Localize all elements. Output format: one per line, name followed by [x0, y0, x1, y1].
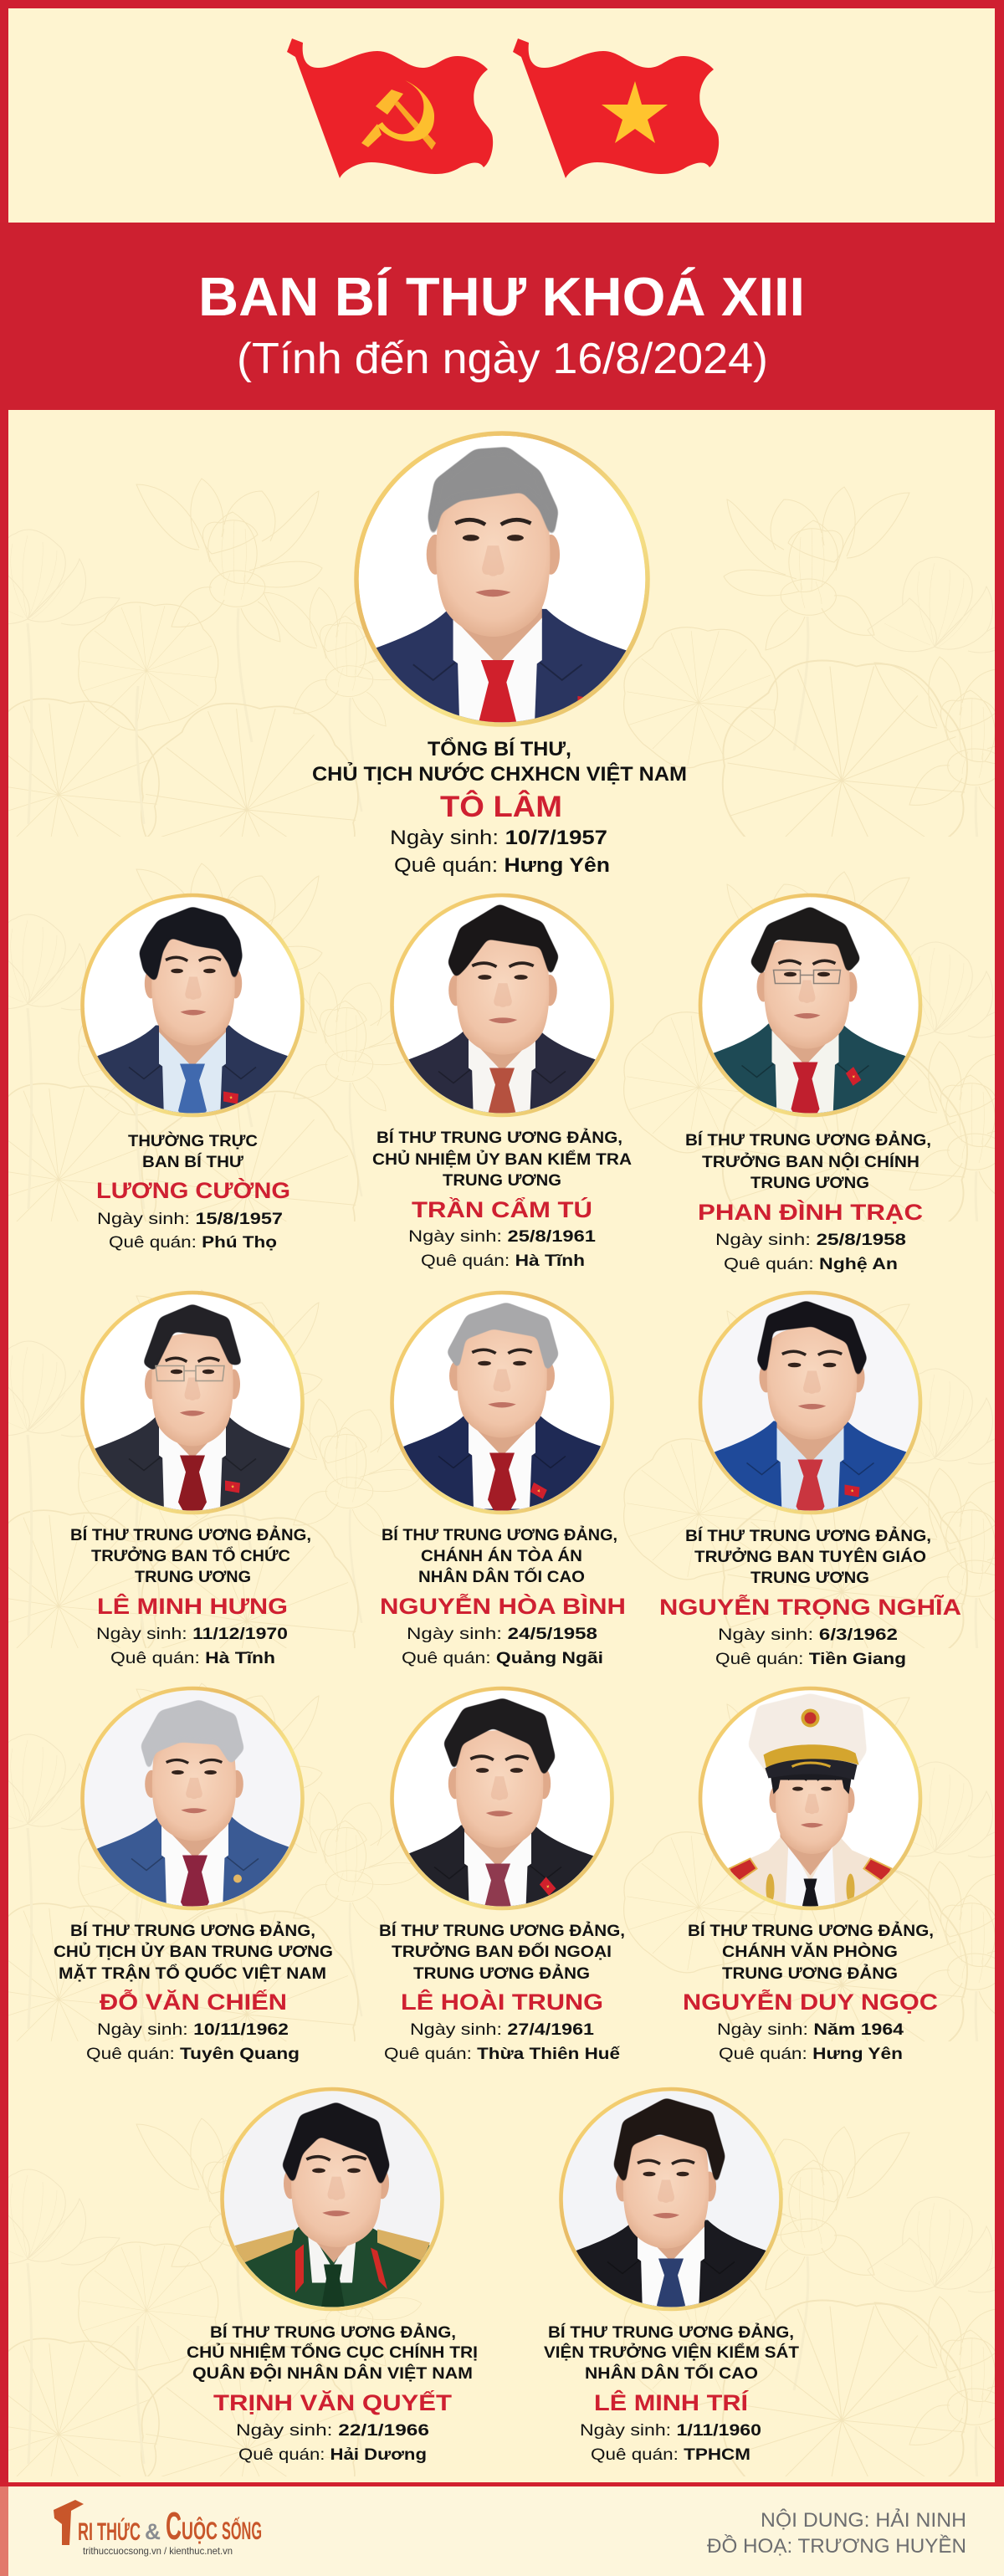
portrait — [389, 1293, 615, 1513]
member: Trần Cẩm Tú — [372, 895, 632, 1270]
role: TRUNG ƯƠNG — [750, 1174, 869, 1192]
role: TRUNG ƯƠNG ĐẢNG — [413, 1964, 590, 1983]
role: BÍ THƯ TRUNG ƯƠNG ĐẢNG, — [685, 1130, 931, 1150]
role — [312, 737, 687, 786]
role — [70, 1525, 311, 1586]
role: TỔNG BÍ THƯ, — [428, 737, 571, 761]
hometown: Quê quán: Quảng Ngãi — [402, 1649, 603, 1667]
role — [544, 2322, 799, 2383]
hometown: Quê quán: Tuyên Quang — [86, 2045, 300, 2063]
hometown: Quê quán: Hưng Yên — [719, 2045, 903, 2063]
member: Lương Cường — [79, 895, 305, 1252]
portrait — [558, 2089, 784, 2319]
role: BÍ THƯ TRUNG ƯƠNG ĐẢNG, — [70, 1525, 311, 1544]
credits: ĐỒ HOẠ: TRƯƠNG HUYỀN — [707, 2534, 966, 2558]
portrait — [79, 1293, 305, 1516]
member: Phan Đình Trạc — [685, 895, 931, 1273]
birth date: Ngày sinh: 27/4/1961 — [410, 2020, 594, 2039]
name: LƯƠNG CƯỜNG — [96, 1178, 290, 1203]
hometown: Quê quán: Hải Dương — [238, 2445, 427, 2464]
role — [54, 1921, 333, 1983]
role: TRUNG ƯƠNG — [135, 1568, 251, 1586]
credits: NỘI DUNG: HẢI NINH — [761, 2507, 966, 2532]
flag: national — [513, 38, 719, 178]
role: BÍ THƯ TRUNG ƯƠNG ĐẢNG, — [210, 2322, 456, 2342]
role: TRUNG ƯƠNG — [750, 1569, 869, 1587]
role — [685, 1526, 931, 1587]
title band — [0, 223, 1004, 410]
role: BÍ THƯ TRUNG ƯƠNG ĐẢNG, — [70, 1921, 315, 1940]
role: BÍ THƯ TRUNG ƯƠNG ĐẢNG, — [376, 1128, 622, 1147]
name: TRẦN CẨM TÚ — [412, 1197, 592, 1222]
hometown: Quê quán: Phú Thọ — [109, 1233, 277, 1252]
role — [187, 2322, 478, 2383]
hometown: Quê quán: Thừa Thiên Huế — [384, 2045, 620, 2063]
subtitle: (Tính đến ngày 16/8/2024) — [237, 335, 768, 383]
role: NHÂN DÂN TỐI CAO — [585, 2363, 758, 2383]
role: TRUNG ƯƠNG — [443, 1171, 561, 1190]
name: NGUYỄN HÒA BÌNH — [380, 1594, 626, 1619]
portrait — [693, 895, 920, 1123]
hometown: Quê quán: TPHCM — [591, 2445, 750, 2464]
portrait — [347, 433, 648, 740]
birth date: Ngày sinh: 11/12/1970 — [96, 1625, 288, 1643]
role: MẶT TRẬN TỔ QUỐC VIỆT NAM — [59, 1963, 326, 1983]
portrait — [219, 2089, 445, 2316]
role: CHỦ NHIỆM TỔNG CỤC CHÍNH TRỊ — [187, 2342, 478, 2362]
role — [379, 1921, 625, 1983]
logo: RI THỨC — [78, 2517, 141, 2546]
member: Nguyễn Trọng Nghĩa — [659, 1293, 961, 1668]
role: THƯỜNG TRỰC — [128, 1130, 258, 1150]
flag: party — [287, 38, 493, 178]
name: NGUYỄN DUY NGỌC — [683, 1990, 938, 2015]
portrait — [79, 895, 305, 1124]
role: NHÂN DÂN TỐI CAO — [418, 1566, 585, 1586]
birth date: Ngày sinh: 10/11/1962 — [97, 2020, 289, 2039]
hometown: Quê quán: Hưng Yên — [394, 854, 610, 877]
name: NGUYỄN TRỌNG NGHĨA — [659, 1595, 961, 1620]
logo: trithuccuocsong.vn / kienthuc.net.vn — [83, 2545, 233, 2557]
name: TRỊNH VĂN QUYẾT — [213, 2390, 452, 2415]
member: Lê Minh Hưng — [70, 1293, 311, 1667]
role: CHỦ TỊCH NƯỚC CHXHCN VIỆT NAM — [312, 761, 687, 786]
name: PHAN ĐÌNH TRẠC — [698, 1200, 923, 1225]
role: BÍ THƯ TRUNG ƯƠNG ĐẢNG, — [379, 1921, 625, 1940]
title: BAN BÍ THƯ KHOÁ XIII — [198, 266, 805, 327]
logo: C — [166, 2504, 182, 2548]
name: LÊ MINH HƯNG — [97, 1594, 288, 1619]
birth date: Ngày sinh: 25/8/1958 — [715, 1231, 906, 1249]
role: CHÁNH ÁN TÒA ÁN — [421, 1545, 582, 1565]
member: Lê Hoài Trung — [379, 1688, 625, 2063]
birth date: Ngày sinh: Năm 1964 — [717, 2020, 904, 2039]
birth date: Ngày sinh: 25/8/1961 — [408, 1227, 596, 1246]
member: Lê Minh Trí — [544, 2089, 799, 2464]
logo — [54, 2500, 262, 2557]
flags panel — [287, 38, 719, 178]
birth date: Ngày sinh: 22/1/1966 — [236, 2421, 429, 2440]
footer — [0, 2482, 1004, 2576]
portrait — [698, 1293, 924, 1519]
role: TRƯỞNG BAN TỔ CHỨC — [91, 1545, 290, 1565]
role: CHÁNH VĂN PHÒNG — [722, 1941, 898, 1961]
birth date: Ngày sinh: 24/5/1958 — [407, 1625, 597, 1643]
portrait — [389, 895, 615, 1128]
credits — [707, 2507, 966, 2558]
role: CHỦ NHIỆM ỦY BAN KIỂM TRA — [372, 1149, 632, 1169]
birth date: Ngày sinh: 6/3/1962 — [718, 1626, 898, 1644]
role: TRƯỞNG BAN TUYÊN GIÁO — [694, 1546, 926, 1566]
member: Nguyễn Duy Ngọc — [683, 1688, 938, 2063]
role — [685, 1130, 931, 1192]
hometown: Quê quán: Nghệ An — [724, 1255, 898, 1273]
role: TRUNG ƯƠNG ĐẢNG — [722, 1964, 898, 1983]
role: BÍ THƯ TRUNG ƯƠNG ĐẢNG, — [548, 2322, 794, 2342]
icon: logo T — [54, 2500, 84, 2545]
hometown: Quê quán: Tiền Giang — [715, 1650, 906, 1668]
member: Tô Lâm — [312, 433, 687, 877]
logo: UỘC — [182, 2517, 218, 2545]
name: LÊ MINH TRÍ — [594, 2390, 749, 2415]
role — [382, 1525, 617, 1586]
name: ĐỖ VĂN CHIẾN — [100, 1990, 287, 2015]
hometown: Quê quán: Hà Tĩnh — [110, 1649, 275, 1667]
role: QUÂN ĐỘI NHÂN DÂN VIỆT NAM — [192, 2363, 473, 2383]
member: Nguyễn Hòa Bình — [380, 1293, 626, 1667]
member: Đỗ Văn Chiến — [54, 1688, 333, 2063]
portrait — [698, 1688, 924, 1916]
hometown: Quê quán: Hà Tĩnh — [421, 1252, 585, 1270]
role: BÍ THƯ TRUNG ƯƠNG ĐẢNG, — [382, 1525, 617, 1544]
portrait — [82, 1688, 308, 1916]
role: BÍ THƯ TRUNG ƯƠNG ĐẢNG, — [685, 1526, 931, 1545]
birth date: Ngày sinh: 1/11/1960 — [580, 2421, 761, 2440]
portrait — [385, 1688, 612, 1924]
name: TÔ LÂM — [440, 790, 562, 823]
name: LÊ HOÀI TRUNG — [401, 1990, 603, 2015]
role: VIỆN TRƯỞNG VIỆN KIỂM SÁT — [544, 2342, 799, 2362]
birth date: Ngày sinh: 15/8/1957 — [97, 1210, 283, 1228]
member: Trịnh Văn Quyết — [187, 2089, 478, 2464]
role — [688, 1921, 934, 1983]
role — [128, 1130, 258, 1171]
logo: & — [145, 2519, 161, 2544]
logo: SỐNG — [222, 2517, 262, 2545]
role: TRƯỞNG BAN NỘI CHÍNH — [702, 1151, 919, 1171]
role: BÍ THƯ TRUNG ƯƠNG ĐẢNG, — [688, 1921, 934, 1940]
role: CHỦ TỊCH ỦY BAN TRUNG ƯƠNG — [54, 1941, 333, 1961]
role: TRƯỞNG BAN ĐỐI NGOẠI — [392, 1941, 612, 1961]
role: BAN BÍ THƯ — [142, 1152, 244, 1171]
birth date: Ngày sinh: 10/7/1957 — [390, 827, 607, 849]
role — [372, 1128, 632, 1190]
